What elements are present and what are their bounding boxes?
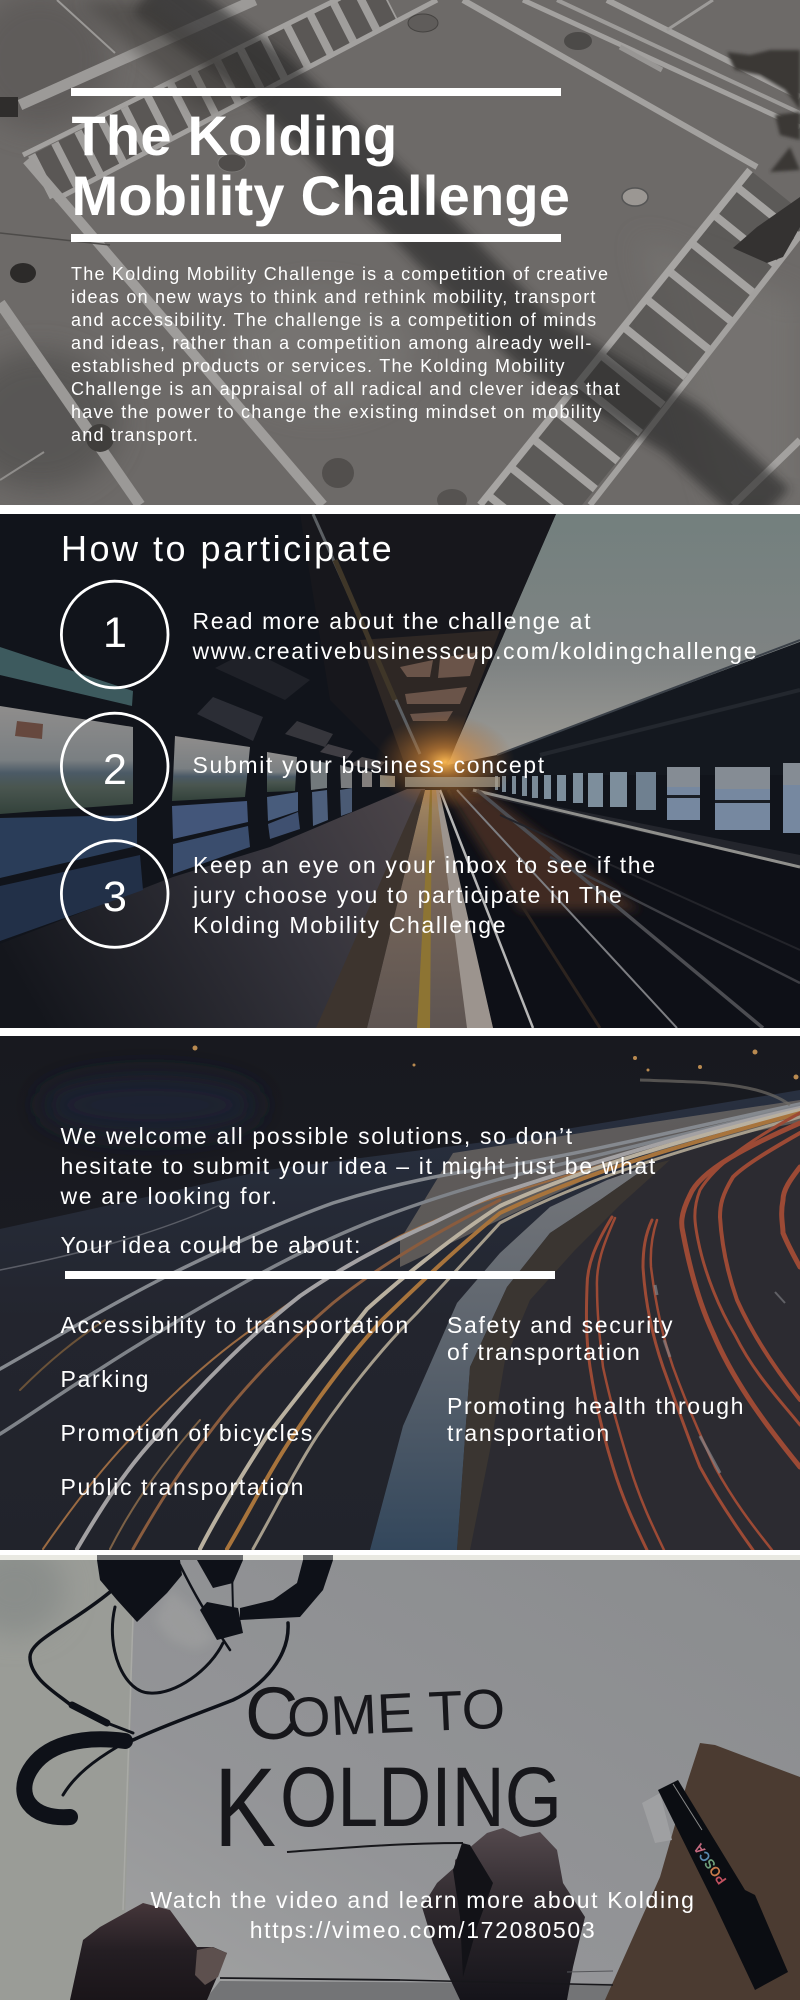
step 3 bbox=[61, 841, 657, 947]
panel: ideas bbox=[0, 1036, 800, 1550]
trackbed bbox=[440, 790, 800, 1028]
item: bicycles: Promotion of bicycles bbox=[60, 1420, 314, 1446]
title: Mobility Challenge bbox=[72, 164, 570, 227]
step 1 bbox=[61, 581, 758, 688]
badge: 2: 2 bbox=[103, 746, 127, 794]
item: safety: of transportation bbox=[447, 1339, 641, 1365]
top rule bbox=[71, 88, 561, 96]
right crosswalk bbox=[480, 170, 800, 520]
platform floor bbox=[0, 789, 425, 1028]
list: left column bbox=[60, 1312, 410, 1500]
photo: night highway light trails bbox=[0, 1036, 800, 1550]
item: health: Promoting health through bbox=[447, 1393, 745, 1419]
step 1 text: www.creativebusinesscup.com/koldingchallenge bbox=[192, 638, 758, 664]
handwritten sign: OLDING bbox=[280, 1750, 562, 1844]
item: public transportation: Public transportation bbox=[60, 1474, 305, 1500]
list heading: Your idea could be about: bbox=[60, 1232, 362, 1258]
marker pen bbox=[658, 1780, 788, 1990]
street lights bbox=[192, 1046, 798, 1080]
pavement shadow bbox=[150, 0, 770, 510]
step 3 text: Kolding Mobility Challenge bbox=[193, 912, 507, 938]
sun glow bbox=[375, 714, 515, 810]
marker pen: POSCA bbox=[690, 1841, 729, 1887]
intro text: Challenge is an appraisal of all radical and clever ideas that bbox=[71, 379, 621, 399]
right windows bbox=[667, 767, 700, 820]
cork board bbox=[605, 1743, 800, 2000]
badge: 2 bbox=[61, 713, 168, 820]
road median bbox=[370, 1165, 650, 1550]
panel: how to participate bbox=[0, 514, 800, 1028]
intro text: have the power to change the existing mindset on mobility bbox=[71, 402, 603, 422]
panel: intro bbox=[0, 0, 800, 530]
upper-right road lines bbox=[463, 0, 757, 167]
invitation text: We welcome all possible solutions, so don’t bbox=[60, 1123, 574, 1149]
station sign bbox=[0, 647, 133, 706]
photo: hand writing on paper bbox=[0, 1555, 800, 2000]
badge: 3: 3 bbox=[103, 873, 127, 921]
unshaded strip bbox=[0, 1555, 800, 1560]
step 2 bbox=[61, 713, 546, 820]
video caption: Watch the video and learn more about Kolding bbox=[150, 1887, 696, 1913]
handwritten sign bbox=[214, 1672, 562, 1870]
bottom rule bbox=[71, 234, 561, 242]
photo: train platform at sunset bbox=[0, 514, 800, 1028]
item: parking: Parking bbox=[60, 1366, 150, 1392]
white and amber trails bbox=[0, 1104, 800, 1549]
bright trail bundle bbox=[400, 1100, 800, 1267]
headphones bbox=[155, 1590, 215, 1650]
left windows bbox=[0, 706, 133, 814]
step 3 text: Keep an eye on your inbox to see if the bbox=[193, 852, 657, 878]
red trails bbox=[586, 1113, 800, 1550]
intro text: and ideas, rather than a competition among already well- bbox=[71, 333, 593, 353]
right platform roof bbox=[470, 642, 800, 775]
badge: 1: 1 bbox=[103, 609, 127, 657]
handwritten sign: K bbox=[214, 1745, 276, 1870]
badge: 3 bbox=[61, 841, 168, 947]
left hand bbox=[70, 1903, 227, 2000]
invitation text: we are looking for. bbox=[60, 1183, 279, 1209]
heading: How to participate bbox=[61, 528, 394, 569]
invitation text: hesitate to submit your idea – it might just be what bbox=[60, 1153, 657, 1179]
title: The Kolding bbox=[72, 104, 397, 167]
step 1 text: Read more about the challenge at bbox=[192, 608, 592, 634]
intro text: established products or services. The Kolding Mobility bbox=[71, 356, 566, 376]
video caption: https://vimeo.com/172080503 bbox=[250, 1917, 596, 1943]
intro text: ideas on new ways to think and rethink mobility, transport bbox=[71, 287, 597, 307]
intro text: and transport. bbox=[71, 425, 199, 445]
list: right column bbox=[447, 1312, 745, 1446]
item: health: transportation bbox=[447, 1420, 611, 1446]
badge: 1 bbox=[61, 581, 168, 688]
step 3 text: jury choose you to participate in The bbox=[192, 882, 624, 908]
step 2 text: Submit your business concept bbox=[192, 752, 546, 778]
item: safety: Safety and security bbox=[447, 1312, 674, 1338]
intro text: and accessibility. The challenge is a competition of minds bbox=[71, 310, 597, 330]
left roof bbox=[300, 514, 556, 770]
intro text: The Kolding Mobility Challenge is a competition of creative bbox=[71, 264, 609, 284]
blue wall panels bbox=[0, 815, 137, 878]
panel: video bbox=[0, 1545, 800, 2000]
manholes bbox=[408, 14, 438, 32]
handwritten sign: OME TO bbox=[286, 1677, 506, 1749]
tree shadow bbox=[733, 197, 800, 263]
item: accessibility: Accessibility to transportation bbox=[60, 1312, 410, 1338]
rule bbox=[65, 1271, 555, 1279]
lane marks bbox=[700, 1436, 720, 1473]
handwritten sign: C bbox=[245, 1672, 298, 1755]
photo: crosswalks from above bbox=[0, 0, 800, 505]
writing hand bbox=[422, 1828, 585, 2000]
upper-left crosswalk bbox=[39, 0, 388, 178]
